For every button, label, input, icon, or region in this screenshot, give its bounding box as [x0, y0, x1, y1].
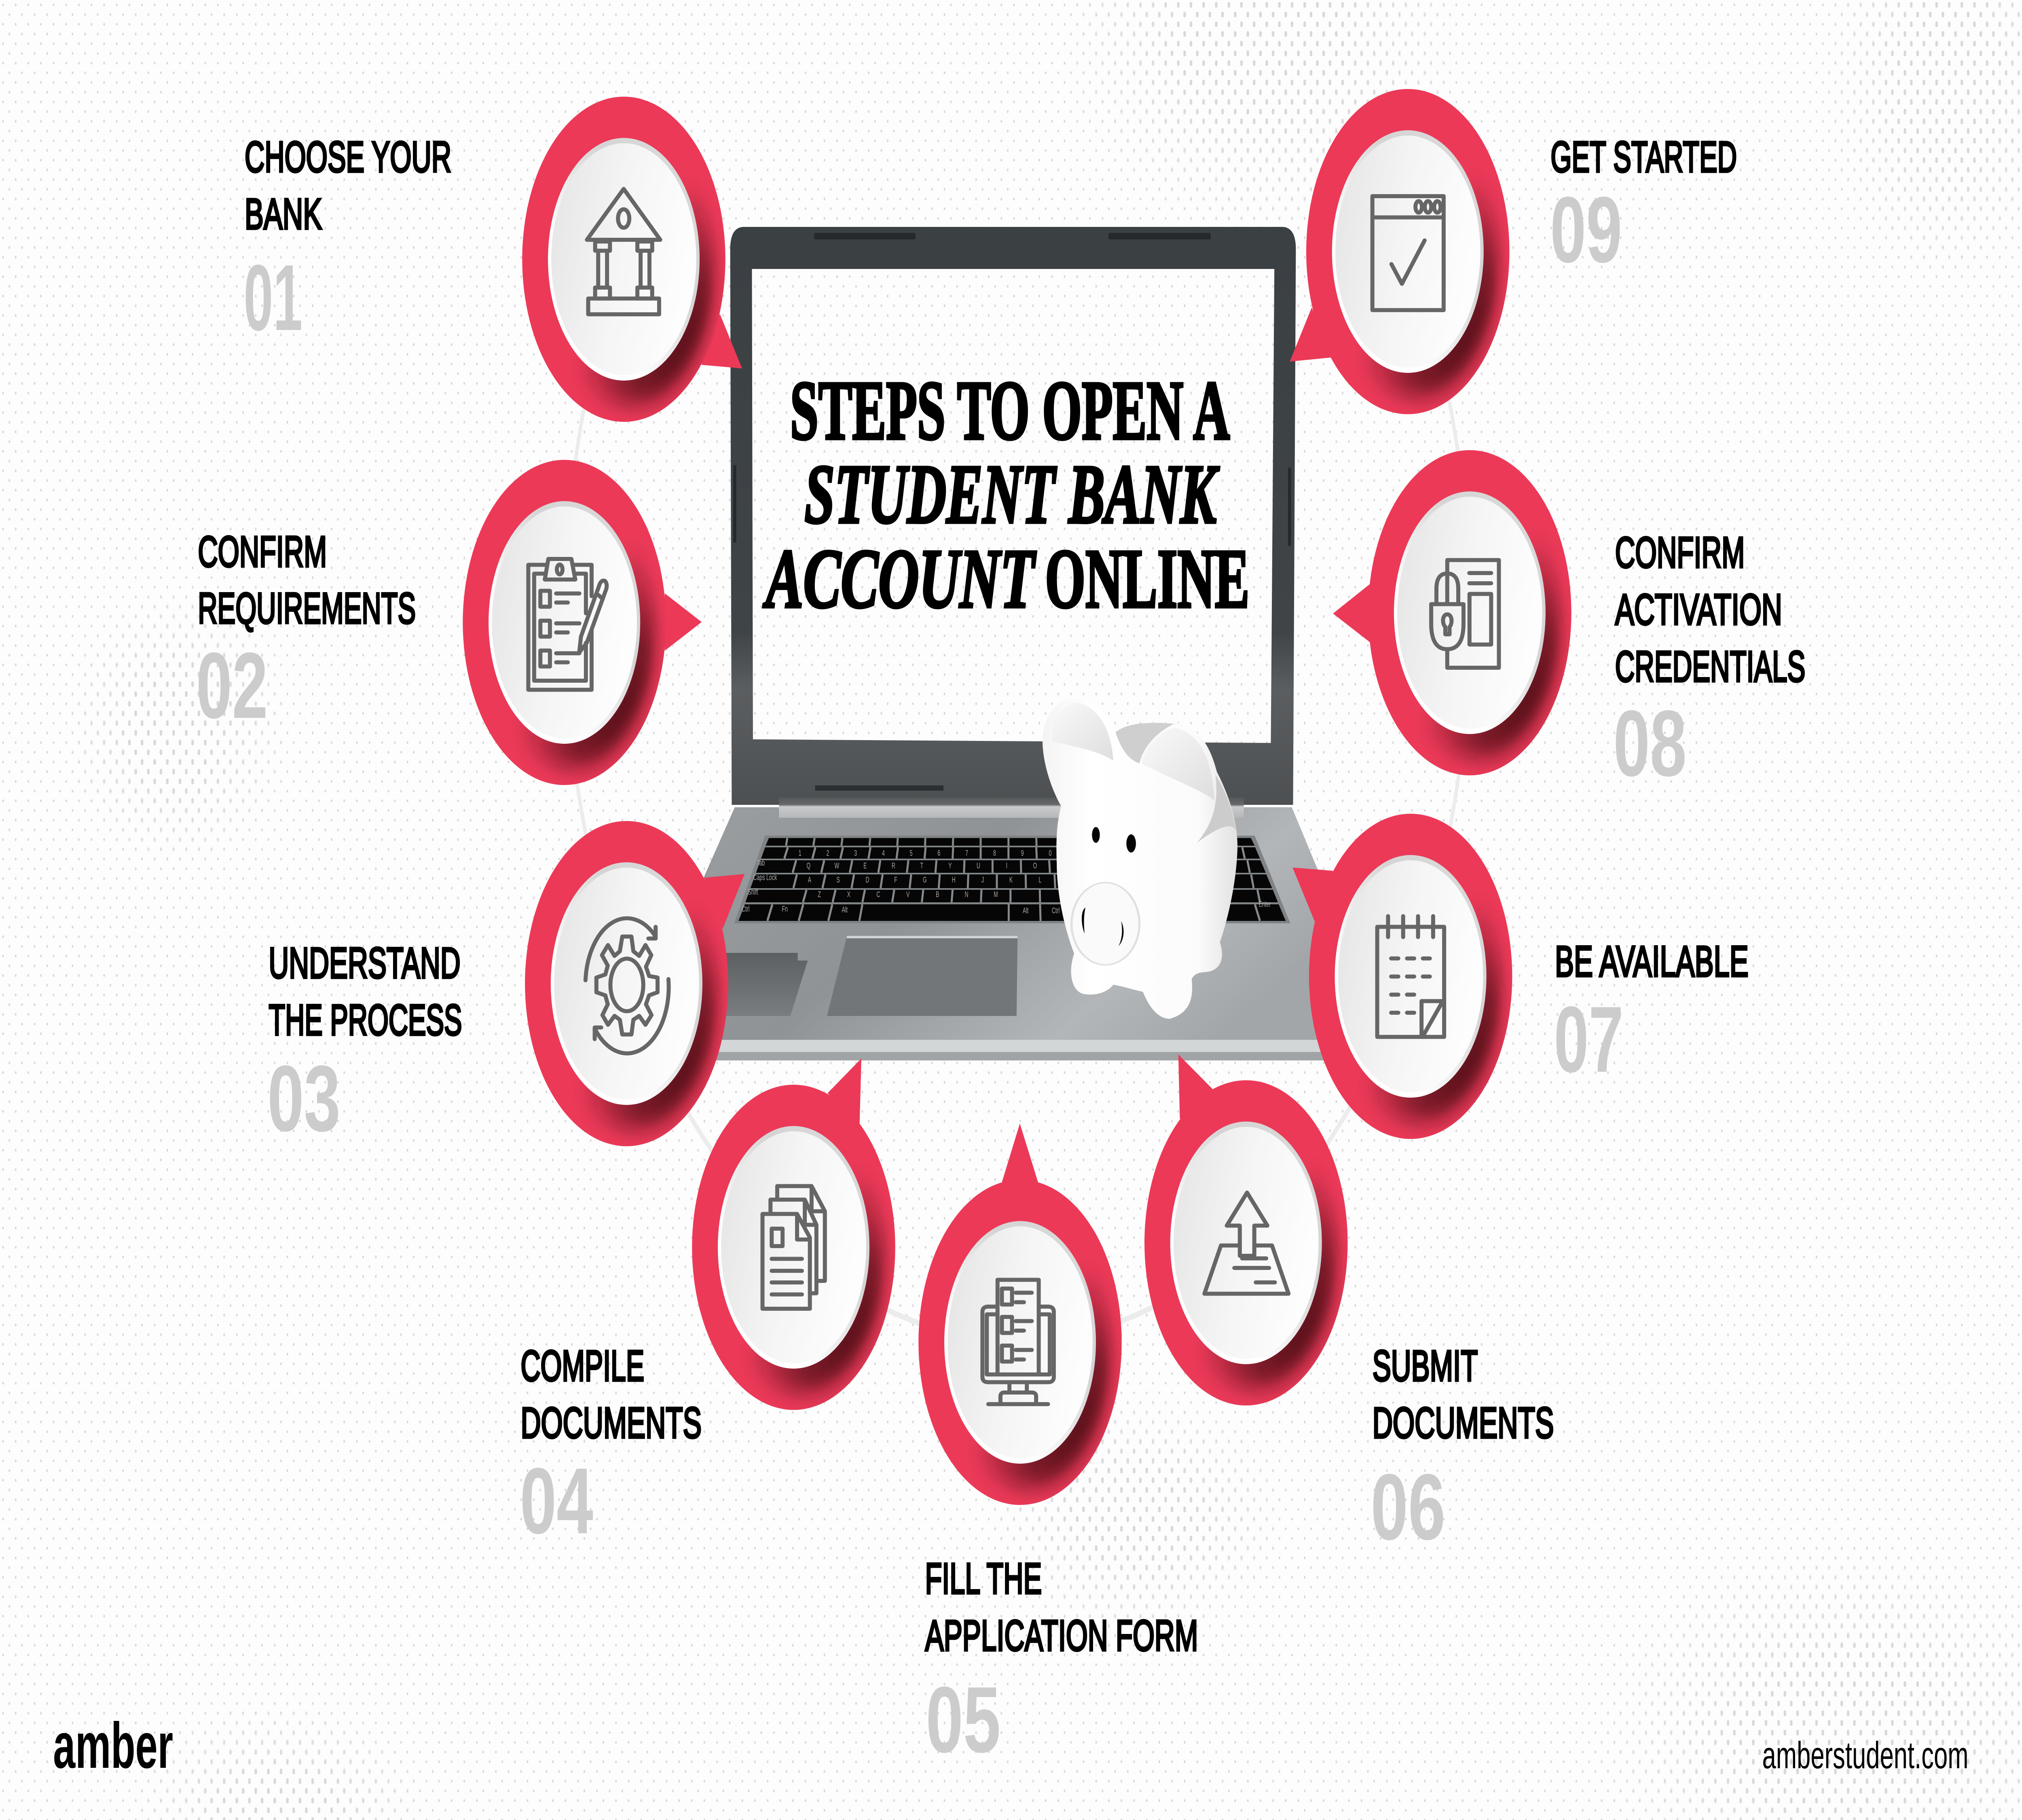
label: step 2	[196, 527, 416, 738]
icon: calendar	[1377, 916, 1444, 1037]
keyboard key labels: K	[1009, 875, 1013, 885]
label: step 7: 07	[1554, 987, 1623, 1092]
keyboard key labels: U	[977, 861, 980, 870]
pig left ear	[1052, 703, 1113, 761]
icon: upload document	[1204, 1193, 1288, 1294]
keyboard key labels: 8	[993, 849, 996, 858]
label: step 3: UNDERSTAND	[269, 939, 461, 988]
keyboard key labels: 3	[854, 849, 857, 858]
keyboard key labels: Fn	[782, 904, 788, 914]
step 5 bubble	[918, 1124, 1122, 1505]
keyboard key labels: 9	[1021, 849, 1024, 858]
icon: application form on monitor	[982, 1280, 1054, 1404]
keyboard key labels: Tab	[757, 858, 765, 868]
step 6 bubble	[1144, 1054, 1347, 1405]
pig nostrils	[1082, 908, 1123, 946]
keyboard key gaps	[768, 838, 1260, 921]
piggy bank	[1043, 698, 1237, 1019]
label: step 4: 04	[520, 1448, 593, 1553]
step 8 bubble	[1333, 450, 1571, 775]
label: step 3: 03	[267, 1046, 341, 1151]
label: step 5	[925, 1554, 1198, 1772]
keyboard key labels: Z	[818, 890, 821, 899]
keyboard key labels: H	[952, 875, 956, 885]
laptop	[657, 227, 1365, 1060]
keyboard key labels: C	[876, 890, 880, 899]
keyboard key labels: L	[1038, 875, 1041, 885]
label: step 8: CREDENTIALS	[1615, 642, 1805, 691]
keyboard key labels: G	[923, 875, 927, 885]
title	[763, 364, 1249, 626]
keyboard key labels: A	[808, 875, 812, 885]
keyboard key labels: I	[1006, 861, 1007, 870]
label: step 2: REQUIREMENTS	[198, 584, 416, 633]
keyboard well	[734, 836, 1290, 923]
label: step 5: FILL THE	[925, 1554, 1042, 1603]
laptop screen lid	[730, 227, 1296, 805]
keyboard key labels: 7	[965, 849, 968, 858]
step 3 bubble	[525, 821, 745, 1146]
label: step 4: COMPILE	[521, 1342, 644, 1390]
icon: clipboard checklist	[528, 559, 607, 690]
keyboard key labels: F	[894, 875, 897, 885]
label: step 1: BANK	[245, 190, 322, 239]
step 1 bubble	[522, 97, 742, 422]
pig eyes	[1092, 827, 1136, 853]
label: step 8	[1613, 528, 1805, 796]
keyboard key labels: T	[920, 861, 923, 870]
label: step 2: CONFIRM	[198, 527, 327, 576]
keyboard key labels: S	[836, 875, 840, 885]
label: step 4	[520, 1342, 702, 1553]
keyboard key labels: 1	[799, 849, 802, 858]
step 2 bubble	[463, 460, 702, 785]
keyboard key rows	[738, 838, 1286, 921]
keyboard key labels: R	[892, 861, 895, 870]
keyboard key labels: J	[981, 875, 984, 885]
title: STUDENT BANK	[804, 447, 1220, 541]
keyboard key labels: O	[1033, 861, 1037, 870]
keyboard key labels: W	[834, 861, 839, 870]
keyboard key labels: 4	[882, 849, 885, 858]
title: ONLINE	[1045, 532, 1249, 626]
label: step 1: CHOOSE YOUR	[245, 133, 451, 182]
icon: browser window checkmark	[1373, 196, 1444, 310]
laptop front lip	[657, 1040, 1365, 1060]
keyboard key labels: N	[964, 890, 969, 899]
title: ACCOUNT	[763, 532, 1036, 626]
keyboard key labels: Ctrl	[1052, 906, 1060, 915]
step 9 bubble	[1290, 89, 1509, 414]
label: step 6: 06	[1371, 1454, 1445, 1559]
step 7 bubble	[1292, 814, 1512, 1139]
keyboard key labels: Caps Lock	[753, 873, 777, 882]
keyboard key labels: M	[994, 890, 998, 899]
keyboard key labels: X	[847, 890, 850, 899]
palm rest sticker	[720, 953, 808, 1016]
label: step 8: ACTIVATION	[1615, 585, 1782, 634]
keyboard key labels: V	[906, 890, 910, 899]
keyboard key labels: B	[936, 890, 939, 899]
keyboard key labels: Ctrl	[742, 904, 749, 914]
label: step 1: 01	[243, 245, 302, 350]
pig flank shading	[1197, 775, 1236, 843]
icon: gear process	[586, 918, 669, 1053]
label: step 9: GET STARTED	[1550, 133, 1737, 182]
label: step 8: CONFIRM	[1615, 528, 1745, 577]
label: step 6: SUBMIT	[1373, 1342, 1478, 1390]
label: step 3: THE PROCESS	[269, 996, 462, 1045]
label: step 7	[1554, 937, 1749, 1092]
label: step 7: BE AVAILABLE	[1555, 937, 1749, 986]
keyboard key labels: D	[865, 875, 869, 885]
title: STEPS TO OPEN A	[790, 364, 1230, 457]
keyboard key labels: 5	[910, 849, 913, 858]
label: step 1	[243, 133, 451, 350]
trackpad	[827, 936, 1017, 1016]
connecting ring arc	[565, 252, 1470, 1340]
pig back slot	[1115, 723, 1174, 764]
keyboard key labels: E	[863, 861, 867, 870]
label: step 9: 09	[1550, 177, 1622, 282]
keyboard key labels: 2	[826, 849, 829, 858]
amber logo: amber	[53, 1710, 173, 1782]
keyboard key labels: Shift	[748, 887, 758, 897]
laptop base	[657, 807, 1365, 1060]
icon: padlock and credentials	[1431, 560, 1499, 668]
label: step 5: 05	[926, 1667, 1000, 1772]
keyboard key labels: 0	[1049, 849, 1051, 858]
label: step 4: DOCUMENTS	[521, 1399, 702, 1448]
label: step 8: 08	[1613, 691, 1687, 796]
website url: amberstudent.com	[1762, 1734, 1969, 1776]
icon: document stack	[762, 1186, 825, 1309]
icon: bank	[587, 189, 660, 314]
keyboard key labels: Alt	[842, 905, 848, 914]
keyboard key labels: 6	[937, 849, 940, 858]
speaker slots	[733, 233, 1291, 791]
keyboard key labels: Q	[807, 861, 810, 870]
keyboard key labels: Enter	[1259, 899, 1271, 909]
step 4 bubble	[692, 1058, 895, 1410]
pig right ear	[1142, 728, 1214, 800]
label: step 6	[1371, 1342, 1554, 1559]
label: step 5: APPLICATION FORM	[925, 1611, 1198, 1660]
keyboard key labels: Y	[948, 861, 952, 870]
label: step 3	[267, 939, 462, 1151]
keyboard key labels	[742, 849, 1271, 915]
label: step 6: DOCUMENTS	[1373, 1399, 1554, 1448]
label: step 9	[1550, 133, 1737, 282]
pig snout	[1072, 882, 1140, 965]
pig body	[1043, 698, 1237, 1019]
hinge	[779, 798, 1244, 818]
label: step 2: 02	[196, 633, 268, 738]
keyboard key labels: Alt	[1023, 906, 1029, 915]
